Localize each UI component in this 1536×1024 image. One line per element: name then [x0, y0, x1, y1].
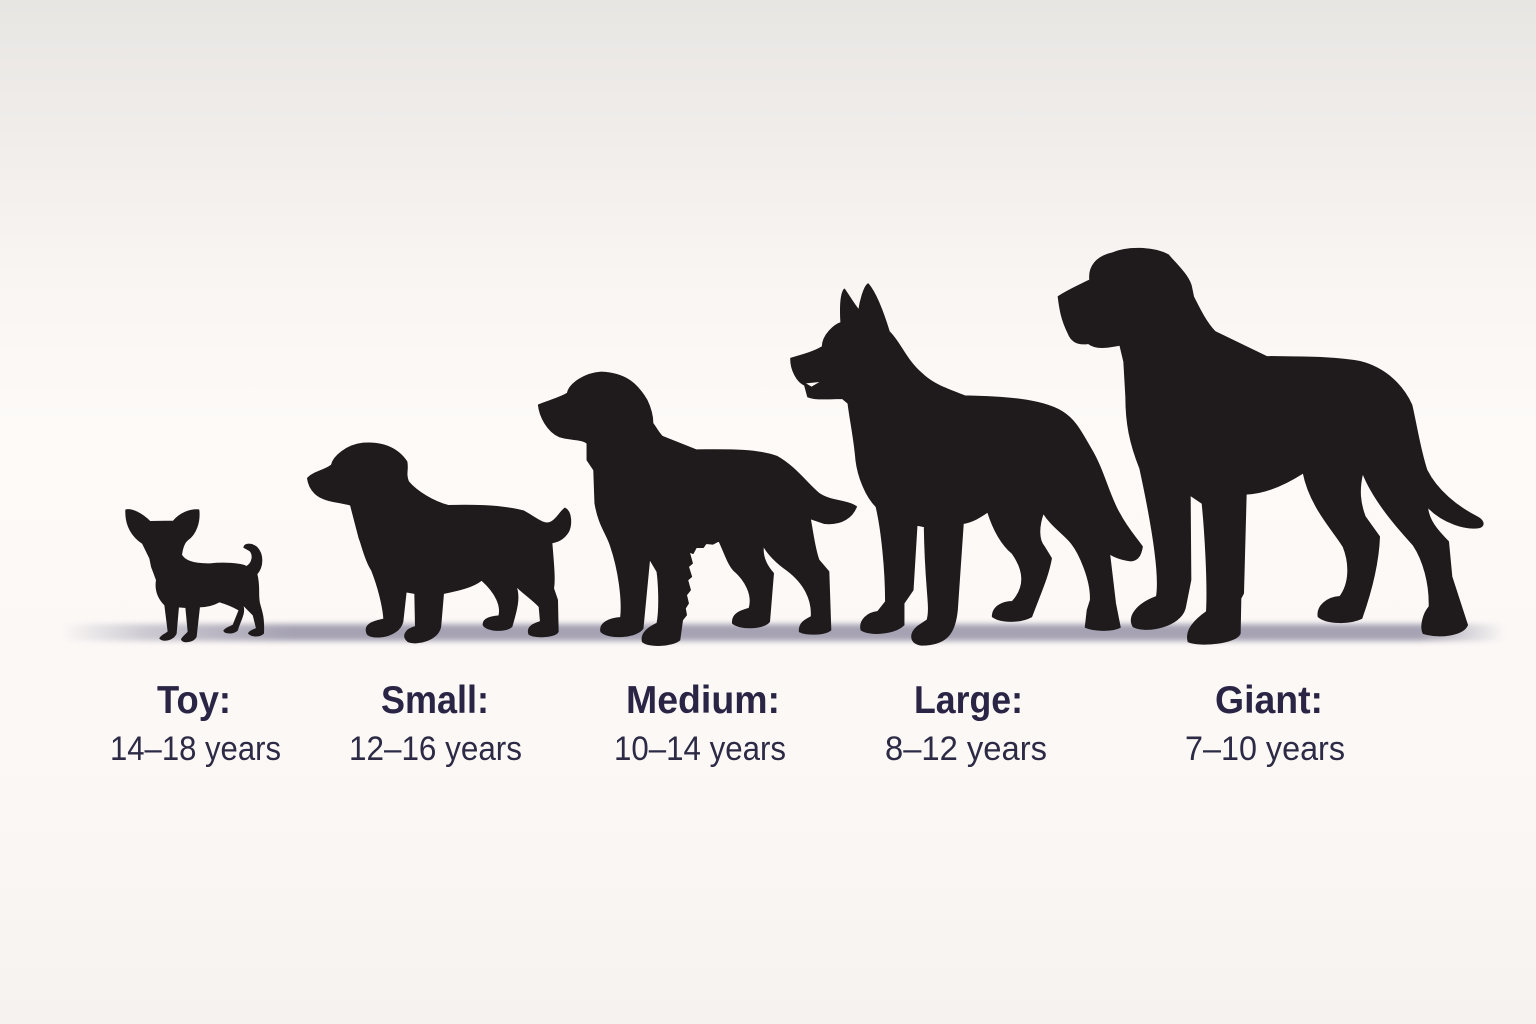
lifespan: giant: 7–10 years [1185, 730, 1345, 768]
heading: medium: Medium: [626, 679, 780, 722]
label: medium [614, 679, 786, 768]
label: large [885, 679, 1047, 768]
icon: toy dog silhouette [126, 510, 263, 642]
icon: giant dog silhouette [1058, 249, 1483, 644]
label: giant [1185, 679, 1345, 768]
heading: giant: Giant: [1215, 679, 1323, 722]
heading: large: Large: [914, 679, 1023, 722]
heading: small: Small: [381, 679, 489, 722]
icon: medium dog silhouette [539, 372, 856, 645]
lifespan: toy: 14–18 years [110, 730, 281, 768]
icon: small dog silhouette [308, 443, 571, 643]
icon: large dog silhouette [791, 284, 1142, 645]
lifespan: small: 12–16 years [349, 730, 522, 768]
label: toy [110, 679, 281, 768]
lifespan: large: 8–12 years [885, 730, 1047, 768]
heading: toy: Toy: [157, 679, 231, 722]
label: small [349, 679, 522, 768]
ground shadow [60, 624, 1505, 641]
lifespan: medium: 10–14 years [614, 730, 786, 768]
